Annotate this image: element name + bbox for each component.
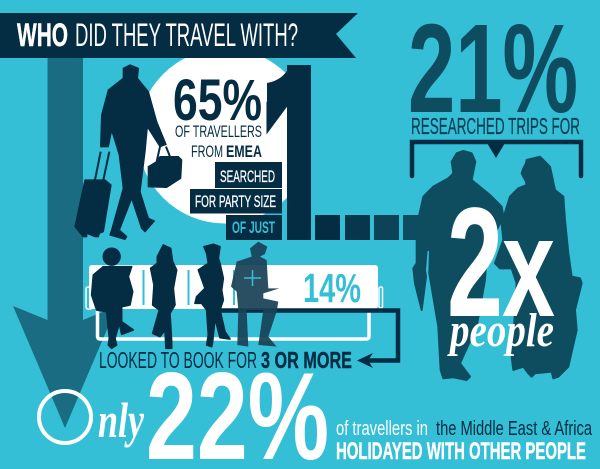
text: of travellers in the Middle East and Africa: of travellers in bbox=[336, 418, 428, 440]
bench bbox=[86, 265, 382, 339]
connector arrow to 3 or more bbox=[220, 310, 398, 368]
icon: man with laptop bbox=[231, 242, 279, 347]
text: 65% of travellers from EMEA: FROM bbox=[191, 142, 223, 161]
title bbox=[17, 17, 298, 53]
text: 65% of travellers from EMEA: 65% bbox=[173, 68, 262, 133]
label: of just: OF JUST bbox=[232, 218, 275, 237]
text: 2x: x bbox=[502, 188, 555, 347]
bracket pointer bbox=[412, 142, 581, 176]
text: looked to book for 3 or more: 3 OR MORE bbox=[261, 347, 352, 373]
text: 1 bbox=[257, 3, 334, 339]
icon: plus bbox=[244, 270, 261, 286]
label: for party size bbox=[190, 189, 282, 214]
title: DID THEY TRAVEL WITH? bbox=[75, 17, 298, 53]
title: WHO bbox=[17, 17, 68, 53]
squares trailing from the 1 bbox=[315, 215, 428, 240]
white circle panel bbox=[144, 58, 287, 224]
label: for party size: FOR PARTY SIZE bbox=[195, 192, 276, 211]
icon: walking traveller with luggage bbox=[75, 65, 182, 239]
label: searched: SEARCHED bbox=[220, 167, 275, 186]
text: 65% of travellers from EMEA: EMEA bbox=[226, 142, 262, 161]
big number 1 bbox=[266, 65, 311, 240]
script: only: nly bbox=[98, 392, 145, 448]
icon: large down arrow bbox=[13, 58, 117, 428]
banner: title bbox=[0, 13, 358, 58]
icon: three seated people bbox=[92, 244, 230, 348]
text: 2x: 2 bbox=[447, 176, 503, 350]
text: of travellers in the Middle East and Africa bbox=[336, 418, 593, 440]
script: only bbox=[39, 391, 145, 448]
text: people: people bbox=[447, 304, 554, 357]
text: 65% of travellers from EMEA bbox=[173, 68, 262, 161]
stat: 14%: 14% bbox=[303, 265, 361, 311]
label: of just bbox=[226, 215, 282, 240]
text: 65% of travellers from EMEA: OF TRAVELLERS bbox=[175, 122, 262, 141]
text: looked to book for 3 or more: LOOKED TO BOOK FOR bbox=[99, 347, 257, 373]
icon: couple silhouette bbox=[413, 151, 582, 380]
label: searched bbox=[215, 162, 282, 188]
